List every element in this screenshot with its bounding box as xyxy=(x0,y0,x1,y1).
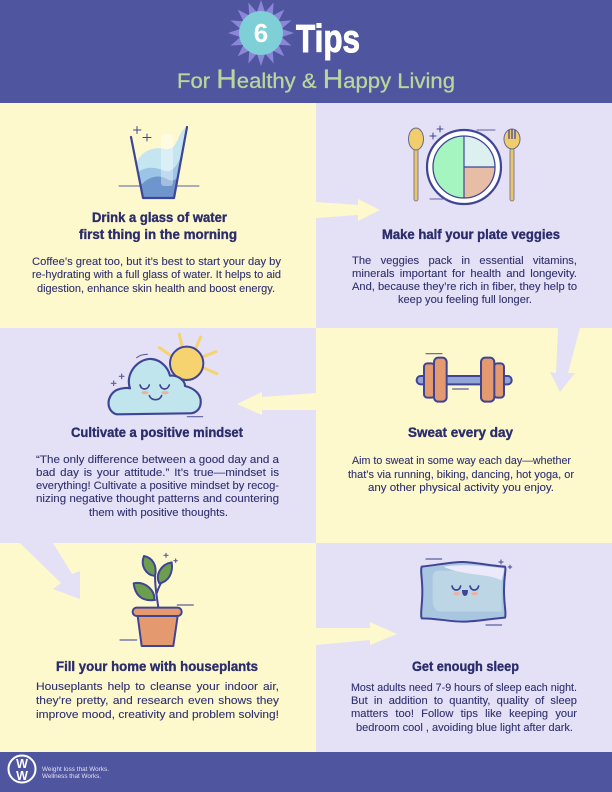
text: houseplants: they’re pretty, and research even shows they xyxy=(36,695,280,707)
icon: cloud and sun xyxy=(109,334,217,417)
text: mindset: them with positive thoughts. xyxy=(89,507,228,519)
subtitle: For Healthy & Happy Living xyxy=(177,64,455,94)
heading: sweat: Sweat every day xyxy=(408,425,513,440)
text: sweat xyxy=(348,455,574,494)
icon: logo: W xyxy=(16,769,28,783)
icon: starburst badge xyxy=(228,0,294,66)
arrow: plate to sweat xyxy=(550,328,580,392)
panel: houseplants xyxy=(0,543,316,752)
text: mindset: “The only difference between a good day and a xyxy=(36,454,279,466)
text: sleep: matters too! Follow tips like keeping your xyxy=(351,708,577,720)
text: sleep: But in addition to quantity, quality of sleep xyxy=(351,695,577,707)
heading: sleep: Get enough sleep xyxy=(412,659,519,674)
text: plate xyxy=(352,255,577,306)
icon: sleeping pillow xyxy=(421,559,512,625)
tagline xyxy=(42,766,109,780)
text: sweat: any other physical activity you enjoy. xyxy=(368,482,554,494)
text: mindset: bad day is your attitude.” It’s true—mindset is xyxy=(36,467,280,479)
heading: water: Drink a glass of water xyxy=(92,210,228,225)
icon: logo: W xyxy=(16,757,28,771)
text: plate: The veggies pack in essential vitamins, xyxy=(352,255,577,267)
arrow: water to plate xyxy=(316,199,380,221)
arrow: mindset to houseplants xyxy=(20,543,80,599)
text: water xyxy=(32,256,282,295)
icon: plate and cutlery xyxy=(408,126,520,204)
icon: glass of water xyxy=(119,126,199,198)
arrow: houseplants to sleep xyxy=(316,622,397,645)
icon: logo xyxy=(8,756,36,783)
panel: sleep xyxy=(316,543,612,752)
text: mindset: everything! Cultivate a positive mindset by recog- xyxy=(36,480,279,492)
header band xyxy=(0,0,612,103)
heading: water: first thing in the morning xyxy=(79,227,237,242)
title: Tips xyxy=(296,18,360,61)
text: plate: minerals important for health and longevity. xyxy=(352,268,577,280)
heading: water xyxy=(79,210,237,242)
panel: water xyxy=(0,103,316,328)
text: houseplants: Houseplants help to cleanse your indoor air, xyxy=(36,681,279,693)
text: mindset: nizing negative thought patterns and countering xyxy=(36,493,279,505)
tagline: Weight loss that Works. xyxy=(42,766,109,773)
text: sleep: Most adults need 7-9 hours of sleep each night. xyxy=(351,682,577,694)
text: sleep xyxy=(351,682,577,734)
panel: mindset xyxy=(0,328,316,543)
text: houseplants: improve mood, creativity and problem solving! xyxy=(36,709,279,721)
heading: houseplants: Fill your home with houseplants xyxy=(56,659,258,674)
text: water: re-hydrating with a full glass of water. It helps to aid xyxy=(32,269,281,281)
heading: plate: Make half your plate veggies xyxy=(382,227,560,242)
text: plate: And, because they’re rich in fiber, they help to xyxy=(352,281,577,293)
text: houseplants xyxy=(36,681,280,721)
panel: sweat xyxy=(316,328,612,543)
text: water: digestion, enhance skin health and boost energy. xyxy=(37,283,275,295)
icon: houseplant xyxy=(120,553,193,646)
text: water: Coffee’s great too, but it’s best to start your day by xyxy=(32,256,282,268)
text: plate: keep you feeling full longer. xyxy=(398,294,532,306)
text: mindset xyxy=(36,454,280,519)
text: sleep: bedroom cool , avoiding blue light after dark. xyxy=(356,722,573,734)
heading: mindset: Cultivate a positive mindset xyxy=(71,425,243,440)
text: sweat: Aim to sweat in some way each day—whether xyxy=(352,455,571,467)
panel: plate xyxy=(316,103,612,328)
icon: dumbbell xyxy=(417,354,512,402)
text: sweat: that’s via running, biking, dancing, hot yoga, or xyxy=(348,469,574,481)
arrow: sweat to mindset xyxy=(237,392,316,415)
icon: starburst badge: 6 xyxy=(254,18,268,48)
footer band xyxy=(0,752,612,792)
tagline: Wellness that Works. xyxy=(42,773,101,780)
